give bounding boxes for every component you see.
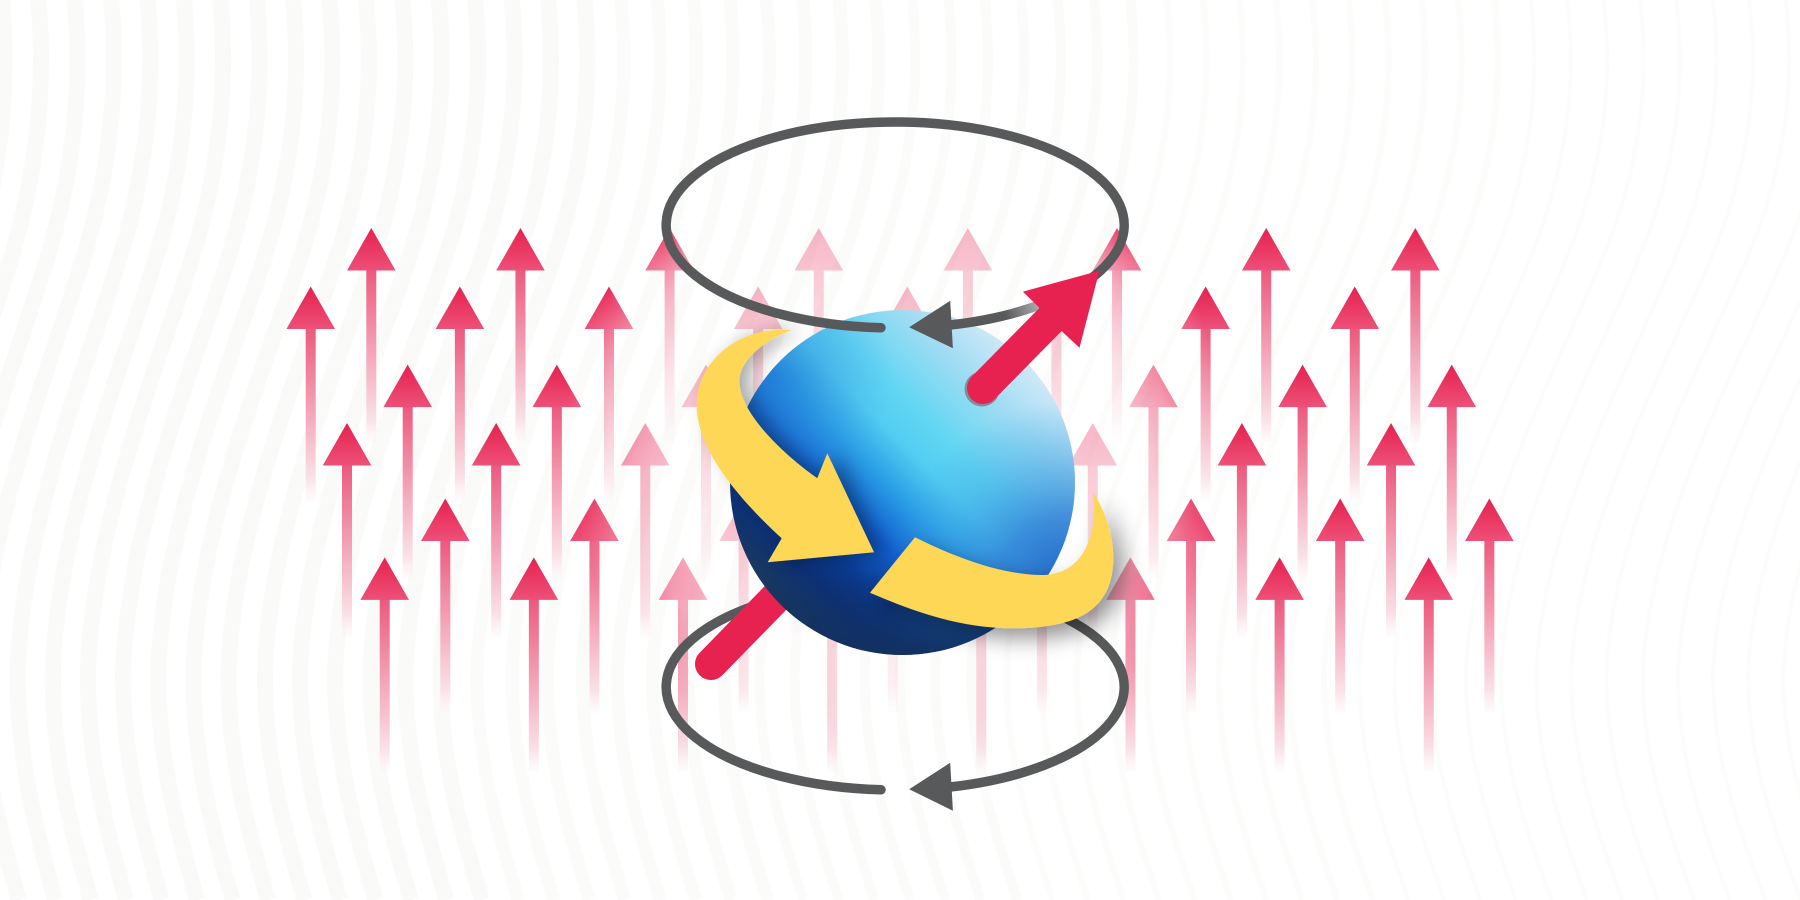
field of upward red arrows: [286, 228, 1514, 771]
axis arrow: lower stick: [711, 578, 795, 664]
blue sphere: [730, 310, 1075, 655]
axis arrow: upper red arrow with head: [964, 271, 1099, 406]
lower rotation ring with arrowhead: [666, 584, 1124, 811]
yellow swoosh arrow: lower right: [870, 492, 1113, 628]
yellow swoosh arrow: upper left: [697, 330, 874, 562]
upper rotation ring with arrowhead: [666, 122, 1124, 348]
infographic canvas: [286, 117, 1514, 811]
